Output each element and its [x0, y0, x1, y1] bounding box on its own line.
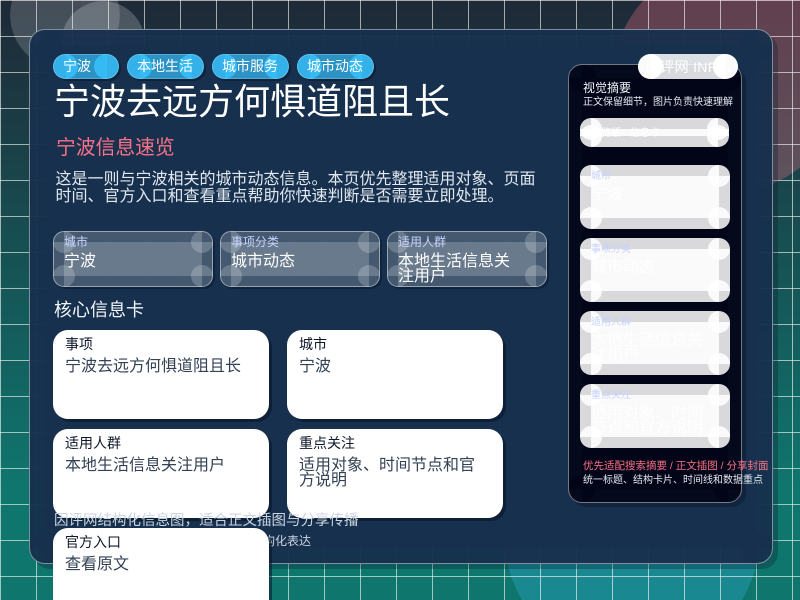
side card: 重点关注 — [580, 384, 730, 448]
intro paragraph: 这是一则与宁波相关的城市动态信息。本页优先整理适用对象、页面 — [56, 171, 536, 188]
side card: 重点关注: 节点和官方说明 — [591, 420, 703, 437]
side card: 事项分类: 城市动态 — [591, 259, 655, 276]
tag: 本地生活 — [127, 54, 206, 81]
side card: 城市 — [580, 165, 730, 229]
tag: 宁波 — [53, 54, 121, 81]
side panel — [568, 54, 769, 507]
stat card: 适用人群 — [387, 231, 549, 289]
info card: 适用人群: 适用人群 — [65, 435, 121, 451]
side card: 适用人群 — [580, 311, 730, 375]
side card: 城市: 宁波 — [591, 186, 623, 203]
stat cards row — [53, 231, 549, 289]
info card: 城市: 城市 — [299, 336, 327, 352]
tag row — [53, 54, 376, 81]
side card: 事项分类 — [580, 238, 730, 302]
stat card: 事项分类: 事项分类 — [231, 235, 279, 249]
tag: 城市服务: 城市服务 — [222, 58, 278, 74]
side card: 适用人群: 本地生活信息关 — [591, 332, 703, 349]
tag: 城市动态 — [297, 54, 376, 81]
stat card: 事项分类 — [220, 231, 382, 289]
tag: 宁波: 宁波 — [63, 58, 91, 74]
stat card: 城市 — [53, 231, 215, 289]
stat card: 适用人群: 注用户 — [398, 268, 446, 285]
info card: 适用人群 — [53, 429, 269, 518]
subtitle: 宁波信息速览 — [56, 137, 175, 159]
info card: 官方入口 — [53, 528, 269, 600]
side card: 重点关注: 适用对象、时间 — [591, 405, 703, 422]
tag: 城市动态: 城市动态 — [307, 58, 363, 74]
info card: 重点关注 — [287, 429, 503, 518]
info card: 事项 — [53, 330, 269, 419]
tag: 城市服务 — [212, 54, 291, 81]
stat card: 适用人群: 适用人群 — [398, 235, 446, 249]
side note highlight: 优先适配搜索摘要 / 正文插图 / 分享封面 — [583, 460, 769, 472]
footer line 2: 因评网 · 信息结构化表达 — [180, 534, 311, 548]
intro paragraph — [56, 170, 536, 205]
info card: 城市: 宁波 — [299, 358, 331, 375]
side card: 适用人群: 注用户 — [591, 347, 639, 364]
stat card: 适用人群: 本地生活信息关 — [398, 253, 510, 270]
side card: 适用人群: 适用人群 — [591, 317, 631, 328]
stat card: 事项分类: 城市动态 — [231, 253, 295, 270]
tag: 本地生活: 本地生活 — [137, 58, 193, 74]
title: 宁波去远方何惧道阻且长 — [54, 81, 450, 122]
section heading: 核心信息卡 — [54, 300, 144, 320]
stat card: 城市: 城市 — [64, 235, 88, 249]
side description: 正文保留细节，图片负责快速理解 — [583, 97, 733, 108]
side card: 城市: 城市 — [591, 171, 611, 182]
info card: 重点关注: 重点关注 — [299, 435, 355, 451]
info card: 适用人群: 本地生活信息关注用户 — [65, 457, 225, 474]
info card: 重点关注: 适用对象、时间节点和官方说明 — [299, 457, 475, 489]
side card: 重点关注: 重点关注 — [591, 390, 631, 401]
footer line 1: 因评网结构化信息图，适合正文插图与分享传播 — [54, 513, 358, 529]
info card: 官方入口: 官方入口 — [65, 534, 121, 550]
stat card: 城市: 宁波 — [64, 253, 96, 270]
info card: 官方入口: 查看原文 — [65, 556, 129, 573]
brand badge: 因评网 INPIN — [646, 59, 732, 75]
info card: 事项: 宁波去远方何惧道阻且长 — [65, 358, 241, 375]
side panel background — [568, 64, 746, 507]
side pill — [580, 118, 729, 147]
info card: 事项: 事项 — [65, 336, 93, 352]
side card: 事项分类: 事项分类 — [591, 244, 631, 255]
intro paragraph: 时间、官方入口和查看重点帮助你快速判断是否需要立即处理。 — [56, 188, 504, 205]
info card: 城市 — [287, 330, 503, 419]
side pill: 速览版 · 信息卡 — [591, 128, 660, 139]
side note: 统一标题、结构卡片、时间线和数据重点 — [583, 475, 763, 486]
side heading: 视觉摘要 — [583, 81, 631, 95]
brand badge — [638, 54, 738, 79]
